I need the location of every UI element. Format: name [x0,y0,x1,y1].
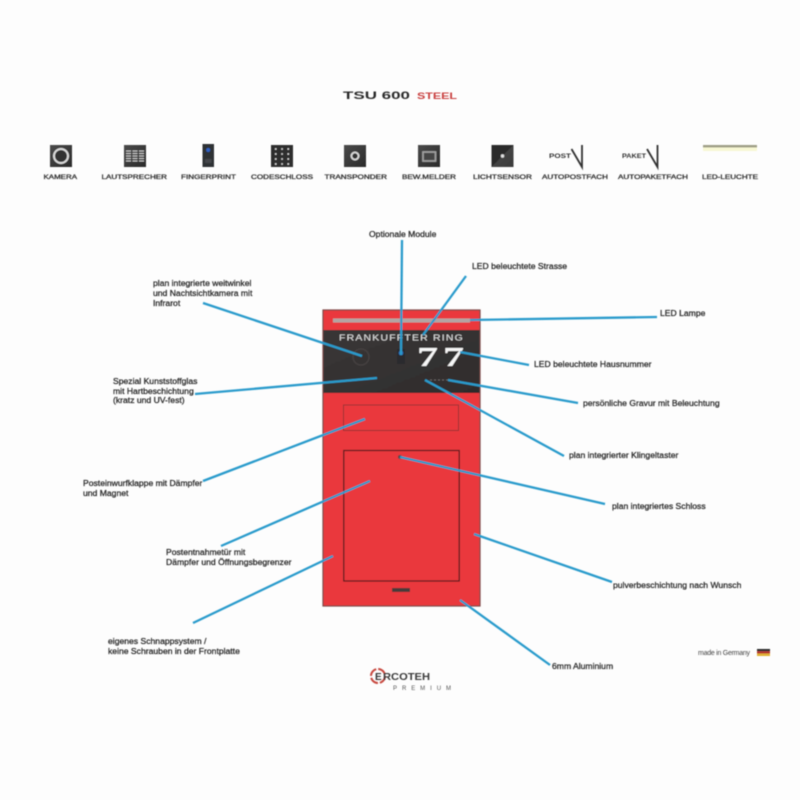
module: Transponder [324,145,388,181]
callout: persönliche Gravur: persönliche Gravur mit Beleuchtung [583,398,720,408]
callout: Postentnahmetür: Postentnahmetür mit [166,547,246,557]
callout: Kamera [153,278,362,356]
callout: Schloss: plan integriertes Schloss [612,501,706,511]
callout: LED beleuchtete Strasse [423,261,567,335]
callout: LED Lampe: LED Lampe [660,308,706,318]
module: Lichtsensor: LICHTSENSOR [473,175,533,181]
logo: Ercoteh Premium: PREMIUM [393,686,451,692]
house number [417,342,464,372]
callout: 6mm Aluminium [460,600,613,671]
lock [398,455,402,459]
module: Bewegungsmelder: BEW.MELDER [402,175,457,181]
module: Autopostfach: POST [549,154,571,160]
icon: German flag [757,649,770,656]
callout: LED beleuchtete Strasse: LED beleuchtete Strasse [472,261,567,271]
icon row: optional modules [44,144,758,181]
callout: Optionale Module: Optionale Module [369,229,437,239]
module: Transponder: TRANSPONDER [324,175,388,181]
callout: LED beleuchtete Hausnummer [460,352,652,369]
callout: LED Lampe [470,308,706,320]
module: Lautsprecher [102,145,168,181]
engraving [430,379,452,381]
module: Fingerprint [181,144,236,181]
callout: Posteinwurfklappe: Posteinwurfklappe mit Dämpfer [83,478,203,488]
callout: Kamera: und Nachtsichtkamera mit [153,288,253,298]
logo: Ercoteh Premium: E [375,672,382,683]
title: TSU 600 [343,90,410,102]
mail slot flap [344,405,458,430]
module: Autopaketfach: AUTOPAKETFACH [618,175,688,181]
module: Kamera [44,145,77,181]
module: Fingerprint: FINGERPRINT [181,175,236,181]
street name: FRANKUFFTER RING [339,332,464,342]
callout: Kamera: plan integrierte weitwinkel [153,278,251,288]
handle plate [392,588,410,592]
callout: Schnappsystem [108,556,333,656]
callout: Schnappsystem: keine Schrauben in der Frontplatte [108,646,240,656]
logo: Ercoteh Premium [371,669,451,692]
callout: Kunststoffglas: mit Hartbeschichtung [113,386,194,396]
made in Germany note: made in Germany [698,650,750,657]
blue indicator [399,351,403,355]
callout: Kunststoffglas: (kratz und UV-fest) [113,395,185,405]
logo: Ercoteh Premium: RCOTEH [383,672,430,683]
callout: Schloss [400,457,706,511]
module: Bewegungsmelder [402,145,457,181]
callout: LED beleuchtete Hausnummer: LED beleuchtete Hausnummer [534,359,652,369]
callout: persönliche Gravur [448,380,720,408]
red housing [323,310,480,606]
LED lamp bar [333,318,470,322]
house number: 7 [417,342,438,372]
module: Autopostfach: AUTOPOSTFACH [542,175,608,181]
product: letterbox front panel [323,310,480,606]
callout: Posteinwurfklappe [83,419,365,498]
title: STEEL [417,91,457,102]
module: Lautsprecher: LAUTSPRECHER [102,175,168,181]
callout: Kunststoffglas: Spezial Kunststoffglas [113,376,197,386]
module: Lichtsensor [473,145,533,181]
callout: Postentnahmetür: Dämpfer und Öffnungsbegrenzer [166,557,292,567]
callout: Pulverbeschichtung [474,534,742,590]
callout: Kamera: Infrarot [153,298,181,308]
house number: 7 [443,342,464,372]
title [343,90,457,102]
dark module band [324,330,480,393]
module: LED-Leuchte [702,145,758,181]
callout: Optionale Module [369,229,437,355]
module: Autopaketfach [618,145,688,181]
made in Germany note [698,649,770,657]
callout: Klingeltaster [425,380,679,460]
callout: Postentnahmetür [166,481,370,567]
module: Autopostfach [542,145,608,181]
fingerprint module [397,349,405,364]
callout: Pulverbeschichtung: pulverbeschichtung nach Wunsch [613,580,742,590]
module: Codeschloss: CODESCHLOSS [251,175,313,181]
callout: Posteinwurfklappe: und Magnet [83,488,129,498]
camera lens [353,349,369,365]
module: Autopaketfach: PAKET [622,154,646,160]
callout: Schnappsystem: eigenes Schnappsystem / [108,636,207,646]
module: LED-Leuchte: LED-LEUCHTE [702,175,758,181]
module: Kamera: KAMERA [44,175,77,181]
module: Codeschloss [251,145,313,181]
removal door [344,450,459,581]
callout: Klingeltaster: plan integrierter Klingeltaster [569,450,679,460]
callout: Kunststoffglas [113,376,377,405]
callout: 6mm Aluminium: 6mm Aluminium [552,661,613,671]
